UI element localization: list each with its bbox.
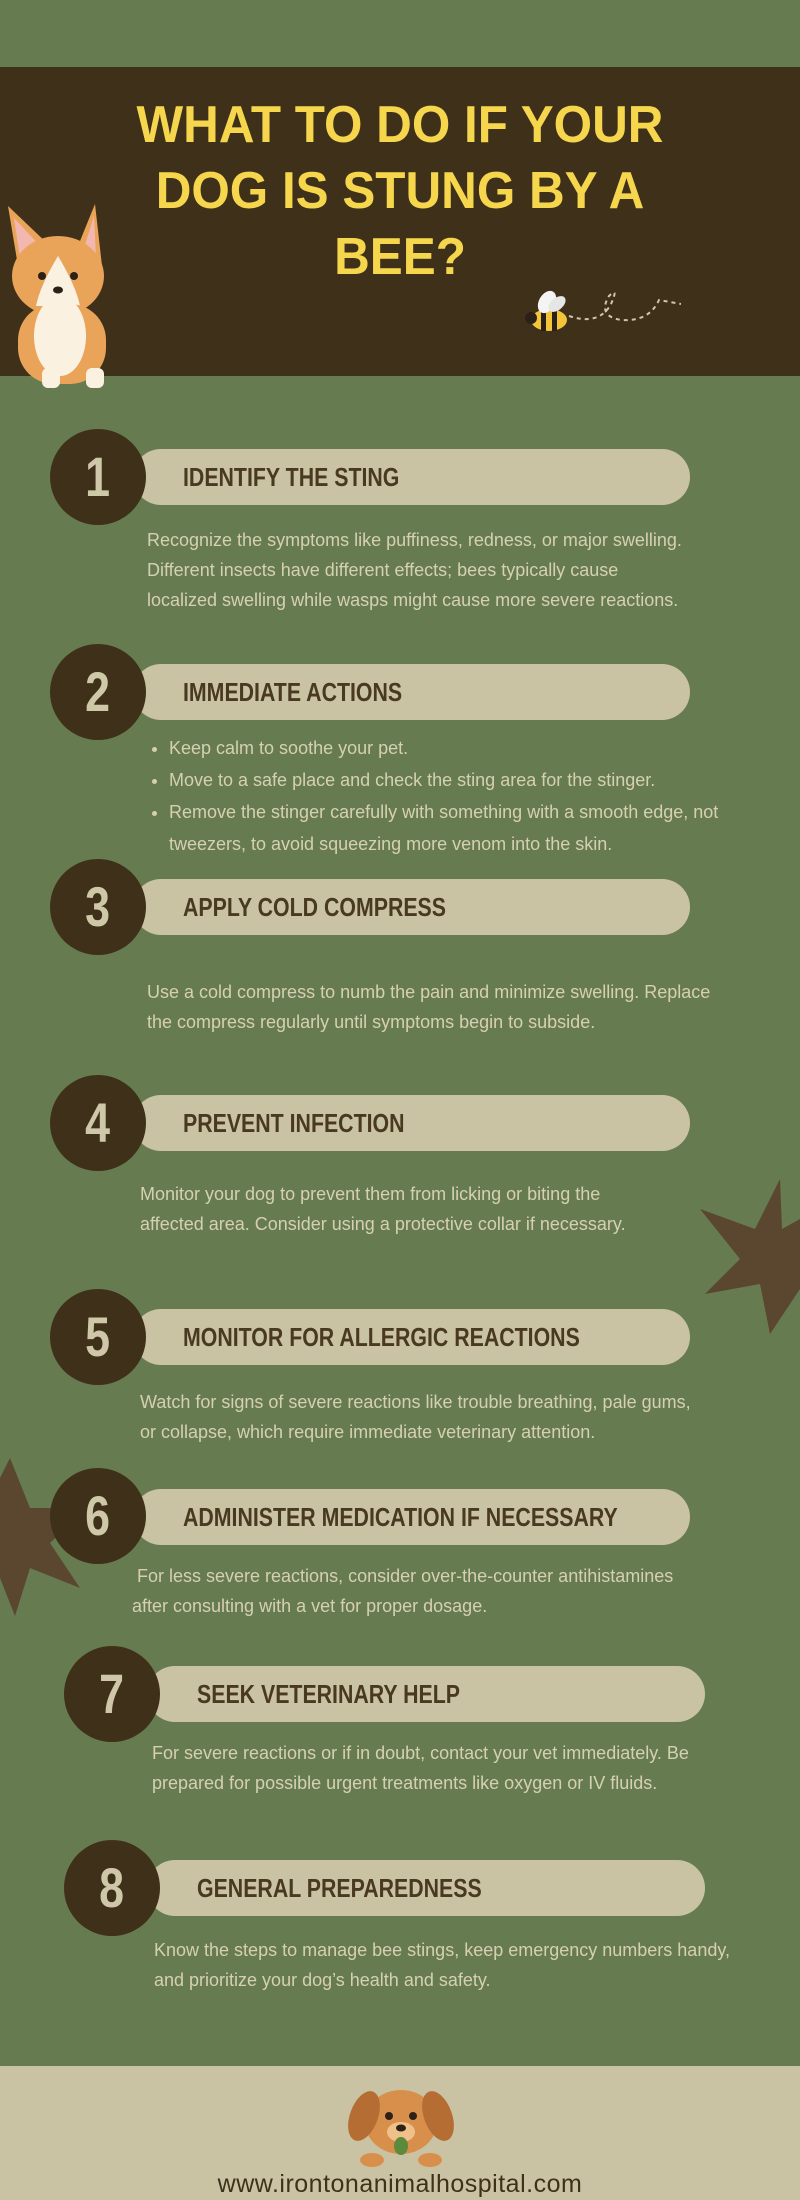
text 7: For severe reactions or if in doubt, contact your vet immediately. Be bbox=[152, 1743, 689, 1763]
text 6: For less severe reactions, consider over-the-counter antihistamines bbox=[137, 1566, 673, 1586]
number 2: 2 bbox=[86, 660, 110, 723]
number 1: 1 bbox=[86, 445, 110, 508]
icon: corgi bbox=[8, 204, 106, 388]
step 4 bbox=[50, 1075, 690, 1234]
pill 1: IDENTIFY THE STING bbox=[183, 462, 399, 492]
text 4 bbox=[140, 1184, 626, 1234]
pill 8: GENERAL PREPAREDNESS bbox=[197, 1873, 482, 1903]
number 1 bbox=[50, 429, 146, 525]
number 2 bbox=[50, 644, 146, 740]
title bbox=[136, 96, 663, 286]
text 1: Different insects have different effects; bees typically cause bbox=[147, 560, 618, 580]
footer bbox=[0, 2066, 800, 2200]
pill 2 bbox=[133, 664, 690, 720]
text 3: Use a cold compress to numb the pain and minimize swelling. Replace bbox=[147, 982, 710, 1002]
pill 4 bbox=[133, 1095, 690, 1151]
text 4: affected area. Consider using a protective collar if necessary. bbox=[140, 1214, 626, 1234]
title: BEE? bbox=[334, 228, 466, 286]
text 1 bbox=[147, 530, 682, 610]
step 8 bbox=[64, 1840, 730, 1990]
step 3 bbox=[50, 859, 710, 1032]
pill 6 bbox=[133, 1489, 690, 1545]
pill 4: PREVENT INFECTION bbox=[183, 1108, 405, 1138]
number 5 bbox=[50, 1289, 146, 1385]
text 2: tweezers, to avoid squeezing more venom into the skin. bbox=[169, 834, 612, 854]
text 6 bbox=[132, 1566, 673, 1616]
number 8 bbox=[64, 1840, 160, 1936]
number 4: 4 bbox=[86, 1091, 110, 1154]
text 7: prepared for possible urgent treatments like oxygen or IV fluids. bbox=[152, 1773, 657, 1793]
number 3 bbox=[50, 859, 146, 955]
step 5 bbox=[50, 1289, 691, 1442]
pill 7: SEEK VETERINARY HELP bbox=[197, 1679, 460, 1709]
pill 5 bbox=[133, 1309, 690, 1365]
number 4 bbox=[50, 1075, 146, 1171]
title: WHAT TO DO IF YOUR bbox=[137, 96, 663, 154]
icon: puppy bbox=[348, 2090, 454, 2167]
text 5: or collapse, which require immediate veterinary attention. bbox=[140, 1422, 595, 1442]
pill 7 bbox=[147, 1666, 705, 1722]
step 1 bbox=[50, 429, 690, 610]
pill 2: IMMEDIATE ACTIONS bbox=[183, 677, 402, 707]
text 8: Know the steps to manage bee stings, keep emergency numbers handy, bbox=[154, 1940, 730, 1960]
text 2: Remove the stinger carefully with something with a smooth edge, not bbox=[169, 802, 718, 822]
text 3 bbox=[147, 982, 710, 1032]
pill 5: MONITOR FOR ALLERGIC REACTIONS bbox=[183, 1322, 580, 1352]
number 8: 8 bbox=[100, 1856, 124, 1919]
text 2 bbox=[152, 738, 718, 854]
text 3: the compress regularly until symptoms begin to subside. bbox=[147, 1012, 595, 1032]
text 8 bbox=[154, 1940, 730, 1990]
decorative star left bbox=[0, 1458, 80, 1616]
pill 6: ADMINISTER MEDICATION IF NECESSARY bbox=[183, 1502, 618, 1532]
icon: bee bbox=[525, 290, 682, 331]
title: DOG IS STUNG BY A bbox=[156, 162, 644, 220]
number 5: 5 bbox=[86, 1305, 110, 1368]
step 7 bbox=[64, 1646, 705, 1793]
number 7 bbox=[64, 1646, 160, 1742]
number 7: 7 bbox=[100, 1662, 124, 1725]
step 2 bbox=[50, 644, 718, 854]
decorative star right bbox=[700, 1179, 800, 1334]
pill 8 bbox=[147, 1860, 705, 1916]
number 3: 3 bbox=[86, 875, 110, 938]
text 7 bbox=[152, 1743, 689, 1793]
text 4: Monitor your dog to prevent them from licking or biting the bbox=[140, 1184, 600, 1204]
text 1: Recognize the symptoms like puffiness, redness, or major swelling. bbox=[147, 530, 682, 550]
text 8: and prioritize your dog’s health and safety. bbox=[154, 1970, 491, 1990]
text 6: after consulting with a vet for proper dosage. bbox=[132, 1596, 487, 1616]
pill 3: APPLY COLD COMPRESS bbox=[183, 892, 446, 922]
text 2: Move to a safe place and check the sting area for the stinger. bbox=[169, 770, 655, 790]
header band bbox=[0, 67, 800, 376]
text 1: localized swelling while wasps might cause more severe reactions. bbox=[147, 590, 678, 610]
number 6 bbox=[50, 1468, 146, 1564]
pill 3 bbox=[133, 879, 690, 935]
pill 1 bbox=[133, 449, 690, 505]
url: www.irontonanimalhospital.com bbox=[218, 2170, 582, 2198]
text 5 bbox=[140, 1392, 691, 1442]
number 6: 6 bbox=[86, 1484, 110, 1547]
text 5: Watch for signs of severe reactions like trouble breathing, pale gums, bbox=[140, 1392, 691, 1412]
step 6 bbox=[50, 1468, 690, 1616]
text 2: Keep calm to soothe your pet. bbox=[169, 738, 408, 758]
